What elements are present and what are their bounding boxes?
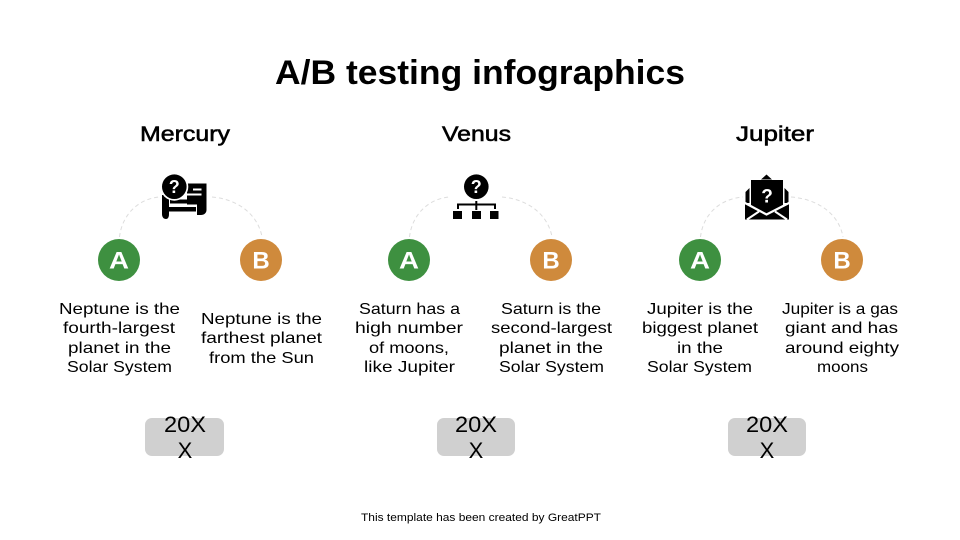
text: option B: Jupiter is a gas	[782, 301, 898, 318]
text: option A	[59, 301, 180, 376]
badge A	[98, 239, 140, 281]
text: option A	[355, 301, 464, 376]
text: option A	[642, 301, 759, 376]
panel: Mercury	[59, 123, 323, 463]
badge A	[388, 239, 430, 281]
text: option A: in the	[677, 340, 723, 357]
badge B: B	[542, 248, 560, 274]
icon: question document: ?	[169, 177, 180, 197]
text: option A: fourth-largest	[63, 320, 176, 337]
text: option B: second-largest	[491, 320, 613, 337]
text: option B	[491, 301, 613, 376]
badge A: A	[690, 248, 710, 274]
badge B	[530, 239, 572, 281]
badge A: A	[399, 248, 419, 274]
year pill: X	[178, 438, 193, 463]
text: option A: high number	[355, 320, 464, 337]
year pill: 20X	[164, 412, 206, 437]
year pill: X	[469, 438, 484, 463]
text: option B: around eighty	[785, 340, 899, 357]
text: option B: Solar System	[499, 359, 604, 376]
icon: question hierarchy	[453, 174, 498, 219]
year pill	[437, 412, 515, 463]
icon: question envelope: ?	[761, 186, 773, 208]
connector arcs	[410, 197, 552, 237]
text: option B: from the Sun	[209, 350, 314, 367]
year pill: 20X	[455, 412, 497, 437]
badge B	[240, 239, 282, 281]
badge B	[821, 239, 863, 281]
year pill: 20X	[746, 412, 788, 437]
text: option B: moons	[817, 359, 868, 376]
text: option B: planet in the	[499, 340, 603, 357]
text: option A: Jupiter is the	[647, 301, 753, 318]
text: option A: like Jupiter	[364, 359, 456, 376]
text: option B: farthest planet	[201, 330, 323, 347]
heading: Mercury: Mercury	[140, 123, 231, 146]
text: option A: Solar System	[67, 359, 172, 376]
footer credit: This template has been created by GreatPPT	[361, 512, 601, 524]
heading: Jupiter: Jupiter	[736, 123, 814, 146]
text: option B: giant and has	[785, 320, 898, 337]
text: option B	[201, 311, 323, 367]
year pill: X	[760, 438, 775, 463]
badge B: B	[833, 248, 851, 274]
icon: question hierarchy: ?	[471, 177, 482, 197]
text: option A: Saturn has a	[359, 301, 460, 318]
text: option A: planet in the	[68, 340, 171, 357]
heading: Venus: Venus	[442, 123, 511, 146]
text: option B	[782, 301, 899, 376]
icon: question envelope	[745, 174, 789, 220]
badge A	[679, 239, 721, 281]
connector arcs	[120, 197, 262, 237]
text: option A: Solar System	[647, 359, 752, 376]
text: option A: Neptune is the	[59, 301, 180, 318]
year pill	[145, 412, 224, 463]
text: option B: Saturn is the	[501, 301, 601, 318]
badge A: A	[109, 248, 129, 274]
badge B: B	[252, 248, 270, 274]
panel: Venus	[355, 123, 613, 463]
text: option A: of moons,	[369, 340, 449, 357]
text: option A: biggest planet	[642, 320, 759, 337]
year pill	[728, 412, 806, 463]
title: A/B testing infographics	[275, 54, 685, 92]
connector arcs	[700, 197, 843, 237]
icon: question document	[160, 173, 206, 219]
panel: Jupiter	[642, 123, 899, 463]
text: option B: Neptune is the	[201, 311, 322, 328]
